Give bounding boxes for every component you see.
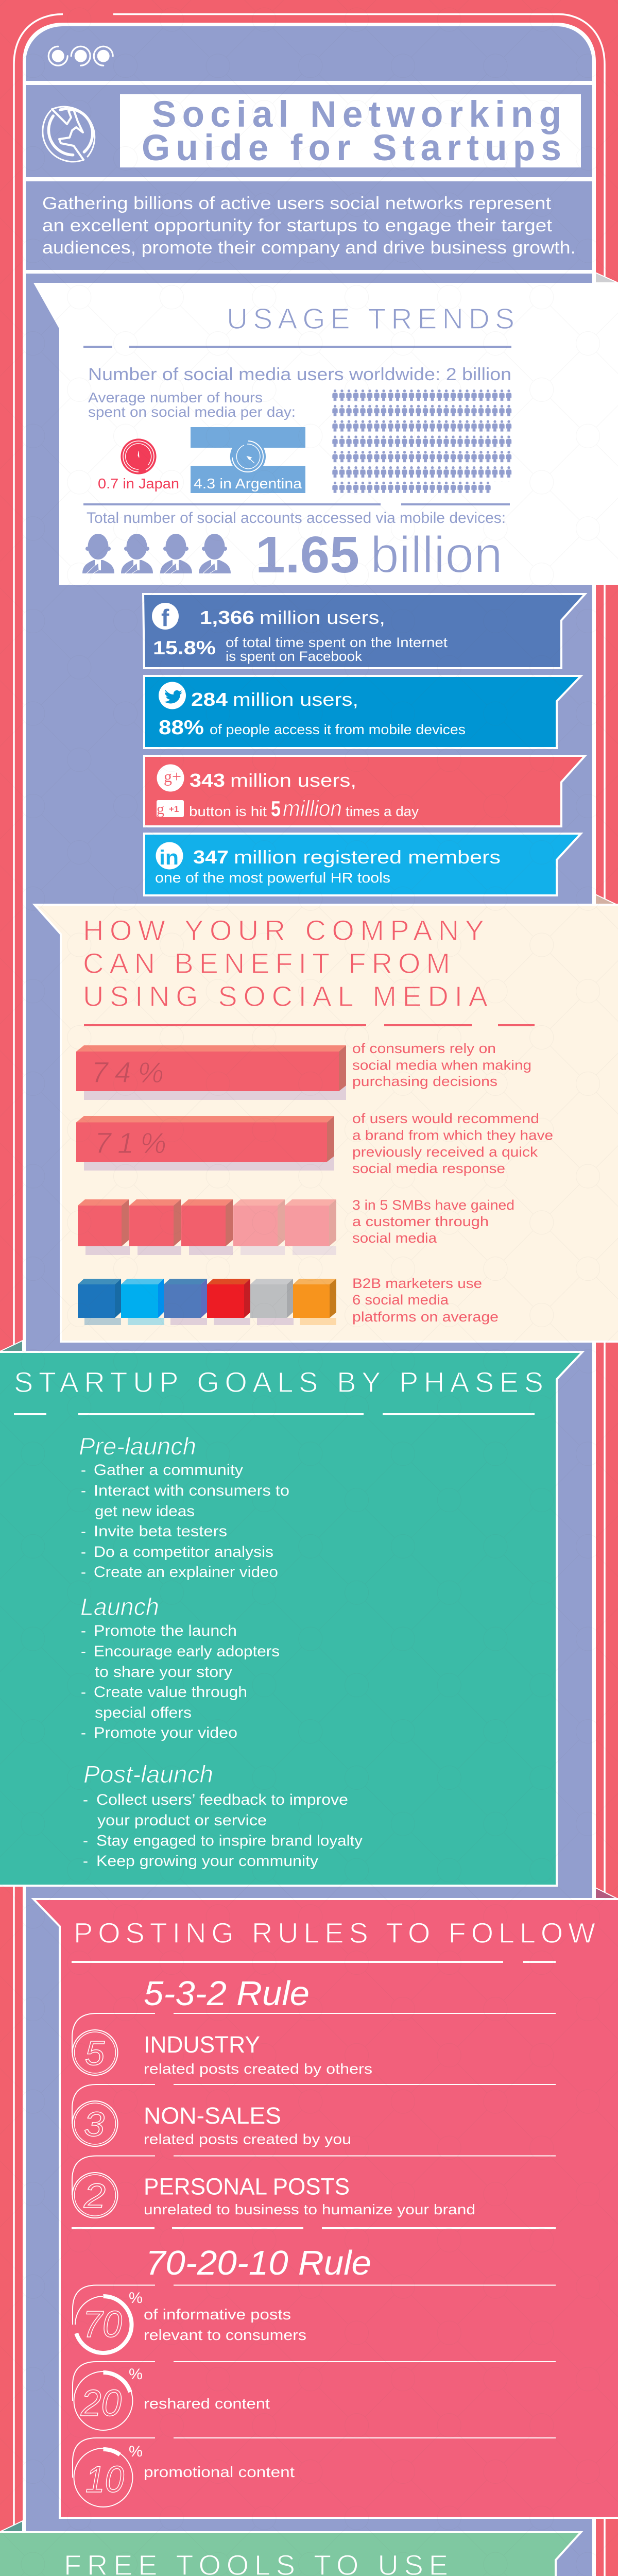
rule: 10 percent bbox=[73, 2438, 556, 2507]
launch list: - bbox=[81, 1724, 86, 1741]
rule: industry: related posts created by others bbox=[144, 2061, 372, 2077]
launch list: - bbox=[81, 1684, 86, 1701]
number: 1.65 billion: billion bbox=[370, 526, 503, 584]
banner: facebook bbox=[143, 594, 585, 668]
linkedin stats bbox=[155, 846, 501, 886]
facebook stats: of total time spent on the Internet bbox=[226, 635, 448, 650]
rule: 10 percent: % bbox=[129, 2443, 143, 2460]
launch list: Launch bbox=[80, 1593, 159, 1620]
rule: non-sales: related posts created by you bbox=[144, 2131, 351, 2147]
panel: usage trends bbox=[33, 283, 618, 585]
text: 71%: of users would recommend bbox=[352, 1111, 539, 1126]
pre-launch list: Pre-launch bbox=[79, 1432, 196, 1460]
icon: japan clock bbox=[121, 438, 157, 474]
post-launch list: - bbox=[83, 1791, 88, 1808]
bar: 74%: 74% bbox=[92, 1056, 164, 1089]
rule: 20 percent bbox=[73, 2362, 556, 2430]
google stats: button is hit bbox=[189, 804, 267, 819]
facebook stats bbox=[153, 607, 448, 664]
bar: 6 platforms blocks bbox=[78, 1279, 336, 1325]
argentina flag bbox=[191, 427, 305, 493]
text: 3 in 5: 3 in 5 SMBs have gained bbox=[352, 1197, 514, 1213]
title panel bbox=[26, 85, 592, 177]
pre-launch list: Create an explainer video bbox=[94, 1564, 278, 1581]
twitter stats: 284 bbox=[191, 689, 228, 710]
heading: 70-20-10 rule: 70-20-10 Rule bbox=[146, 2244, 371, 2282]
text: 6 platforms bbox=[352, 1276, 499, 1325]
post-launch list: Stay engaged to inspire brand loyalty bbox=[96, 1832, 363, 1850]
launch list: Encourage early adopters bbox=[94, 1643, 280, 1660]
launch list: special offers bbox=[95, 1704, 192, 1721]
pre-launch list: get new ideas bbox=[95, 1503, 195, 1520]
facebook stats: million users, bbox=[260, 607, 385, 628]
heading: benefits bbox=[83, 914, 488, 1012]
text: 74%: purchasing decisions bbox=[352, 1074, 497, 1089]
intro panel: Gathering billions of active users social networks represent bbox=[42, 194, 552, 213]
icon: facebook bbox=[152, 603, 179, 631]
fold: benefits bbox=[595, 894, 618, 905]
launch list: Promote the launch bbox=[94, 1622, 237, 1639]
rule: personal posts bbox=[72, 2156, 556, 2218]
text: 74% bbox=[352, 1041, 531, 1089]
post-launch list: Collect users’ feedback to improve bbox=[96, 1791, 348, 1808]
divider bbox=[72, 1961, 556, 1963]
rule: personal posts: PERSONAL POSTS bbox=[144, 2173, 350, 2200]
text: 74%: social media when making bbox=[352, 1057, 531, 1073]
rule: 10 percent: promotional content bbox=[144, 2464, 295, 2481]
rule: industry: 5 bbox=[85, 2034, 105, 2073]
icon: linkedin bbox=[156, 842, 183, 870]
pre-launch list: Interact with consumers to bbox=[94, 1482, 289, 1499]
intro panel: an excellent opportunity for startups to engage their target bbox=[42, 216, 553, 235]
header top panel bbox=[26, 26, 592, 81]
pre-launch list: - bbox=[81, 1564, 86, 1581]
google stats: million users, bbox=[230, 770, 356, 791]
heading: benefits: USING SOCIAL MEDIA bbox=[83, 980, 488, 1012]
icon: globe bbox=[43, 107, 95, 162]
fold: usage bbox=[595, 273, 618, 283]
icon: google plus: g+ bbox=[164, 767, 181, 786]
facebook stats: 1,366 bbox=[200, 607, 254, 628]
twitter stats: 88% bbox=[159, 717, 204, 739]
launch list: - bbox=[81, 1622, 86, 1639]
launch list: Create value through bbox=[94, 1684, 247, 1701]
text: 71%: social media response bbox=[352, 1161, 505, 1176]
facebook stats: 15.8% bbox=[153, 637, 216, 658]
facebook stats: is spent on Facebook bbox=[226, 649, 363, 664]
linkedin stats: one of the most powerful HR tools bbox=[155, 870, 390, 886]
heading: benefits: HOW YOUR COMPANY bbox=[83, 914, 484, 946]
text: 71%: previously received a quick bbox=[352, 1144, 538, 1160]
linkedin stats: million registered members bbox=[234, 846, 501, 868]
rule: 20 percent: 20 bbox=[80, 2383, 122, 2424]
launch list: - bbox=[81, 1643, 86, 1660]
pre-launch list: - bbox=[81, 1544, 86, 1561]
divider bbox=[84, 1024, 535, 1026]
text: 3 in 5 bbox=[352, 1197, 514, 1246]
fold: goals bbox=[0, 1341, 23, 1351]
text: 3 in 5: social media bbox=[352, 1230, 437, 1246]
icon: twitter bbox=[159, 682, 186, 709]
average hours text bbox=[88, 389, 296, 420]
rule: 70 percent bbox=[73, 2285, 556, 2353]
rule: 20 percent: reshared content bbox=[144, 2396, 270, 2412]
bar: 71% bbox=[76, 1116, 334, 1171]
heading: benefits: CAN BENEFIT FROM bbox=[83, 947, 450, 979]
banner: google plus bbox=[144, 756, 585, 826]
google stats: times a day bbox=[346, 804, 419, 819]
google stats: million bbox=[283, 796, 342, 821]
number: 1.65 billion: 1.65 bbox=[255, 526, 359, 584]
rule: personal posts: unrelated to business to humanize your brand bbox=[144, 2201, 475, 2217]
pre-launch list: Invite beta testers bbox=[94, 1523, 227, 1540]
rule: 20 percent: % bbox=[129, 2366, 143, 2383]
pre-launch list: Gather a community bbox=[94, 1462, 243, 1479]
post-launch list: - bbox=[83, 1853, 88, 1870]
post-launch list: Post-launch bbox=[83, 1760, 213, 1788]
twitter stats: million users, bbox=[233, 689, 358, 710]
label: japan: 0.7 in Japan bbox=[98, 476, 179, 492]
icon: google plus bbox=[157, 765, 184, 791]
heading: usage trends: USAGE TRENDS bbox=[227, 302, 514, 335]
text: 71%: a brand from which they have bbox=[352, 1127, 553, 1143]
google stats: 5 bbox=[271, 796, 281, 821]
bar: 71%: 71% bbox=[95, 1127, 166, 1160]
people pictogram grid bbox=[332, 389, 513, 493]
launch list bbox=[80, 1593, 280, 1741]
fold: tools bbox=[0, 2521, 23, 2532]
google stats: g bbox=[157, 801, 164, 818]
panel: free tools bbox=[0, 2532, 581, 2576]
rule: 70 percent: % bbox=[129, 2290, 143, 2307]
text: 3 in 5: a customer through bbox=[352, 1214, 489, 1229]
text: 6 platforms: B2B marketers use bbox=[352, 1276, 482, 1291]
worldwide users text: Number of social media users worldwide: 2 billion bbox=[88, 365, 511, 384]
launch list: to share your story bbox=[95, 1664, 232, 1681]
rule: industry: INDUSTRY bbox=[144, 2031, 260, 2058]
number: 1.65 billion bbox=[255, 526, 503, 584]
pre-launch list: - bbox=[81, 1523, 86, 1540]
title text bbox=[142, 94, 561, 168]
divider bbox=[14, 1413, 535, 1415]
divider bbox=[83, 346, 511, 348]
pre-launch list: - bbox=[81, 1462, 86, 1479]
divider bbox=[72, 2227, 556, 2229]
label: argentina: 4.3 in Argentina bbox=[194, 476, 302, 492]
twitter stats: of people access it from mobile devices bbox=[210, 722, 466, 737]
twitter stats bbox=[159, 689, 466, 739]
panel: company benefits bbox=[35, 905, 618, 1342]
banner: twitter bbox=[144, 676, 581, 748]
text: 71% bbox=[352, 1111, 553, 1176]
post-launch list: - bbox=[83, 1832, 88, 1850]
intro panel bbox=[26, 181, 592, 270]
average hours text: Average number of hours bbox=[88, 389, 263, 405]
post-launch list: your product or service bbox=[97, 1812, 267, 1829]
text: 6 platforms: 6 social media bbox=[352, 1292, 449, 1308]
rule: personal posts: 2 bbox=[83, 2177, 106, 2215]
rule: 10 percent: 10 bbox=[85, 2459, 124, 2500]
rule: industry bbox=[72, 2013, 556, 2077]
google stats: 343 bbox=[190, 770, 225, 791]
pre-launch list: - bbox=[81, 1482, 86, 1499]
post-launch list bbox=[83, 1760, 363, 1870]
banner: linkedin bbox=[144, 834, 581, 895]
heading: goals: STARTUP GOALS BY PHASES bbox=[14, 1366, 543, 1398]
google stats bbox=[157, 770, 419, 821]
rule: 70 percent: of informative posts bbox=[144, 2307, 291, 2323]
icons: people with phones bbox=[82, 534, 231, 573]
title text: Social Networking bbox=[152, 94, 561, 135]
pre-launch list: Do a competitor analysis bbox=[94, 1544, 273, 1561]
rule: non-sales bbox=[72, 2084, 556, 2147]
text: 74%: of consumers rely on bbox=[352, 1041, 496, 1056]
post-launch list: Keep growing your community bbox=[96, 1853, 318, 1870]
rule: 70 percent: relevant to consumers bbox=[144, 2327, 306, 2344]
pre-launch list bbox=[79, 1432, 289, 1581]
divider bbox=[83, 503, 510, 505]
intro panel: audiences, promote their company and drive business growth. bbox=[42, 238, 576, 258]
average hours text: spent on social media per day: bbox=[88, 404, 296, 420]
icon: facebook: f bbox=[161, 604, 169, 631]
panel: startup goals bbox=[0, 1352, 582, 1886]
panel: posting rules bbox=[33, 1899, 618, 2518]
google stats: +1 bbox=[169, 804, 179, 814]
bar: 3 in 5 blocks bbox=[78, 1199, 336, 1255]
title box bbox=[120, 94, 581, 167]
rule: non-sales: NON-SALES bbox=[144, 2103, 281, 2129]
text: 6 platforms: platforms on average bbox=[352, 1309, 499, 1325]
rule: non-sales: 3 bbox=[84, 2105, 105, 2144]
heading: posting rules: POSTING RULES TO FOLLOW bbox=[74, 1917, 595, 1949]
linkedin stats: 347 bbox=[193, 846, 229, 868]
title text: Guide for Startups bbox=[142, 128, 561, 168]
mobile accounts text: Total number of social accounts accessed via mobile devices: bbox=[87, 510, 506, 527]
icon: linkedin: in bbox=[159, 846, 179, 869]
logo: three circles bbox=[48, 46, 113, 65]
fold: posting rules bbox=[595, 1888, 618, 1899]
launch list: Promote your video bbox=[94, 1724, 237, 1741]
bar: 74% bbox=[76, 1045, 346, 1100]
heading: 5-3-2 rule: 5-3-2 Rule bbox=[144, 1974, 310, 2013]
rule: 70 percent: 70 bbox=[83, 2304, 122, 2345]
